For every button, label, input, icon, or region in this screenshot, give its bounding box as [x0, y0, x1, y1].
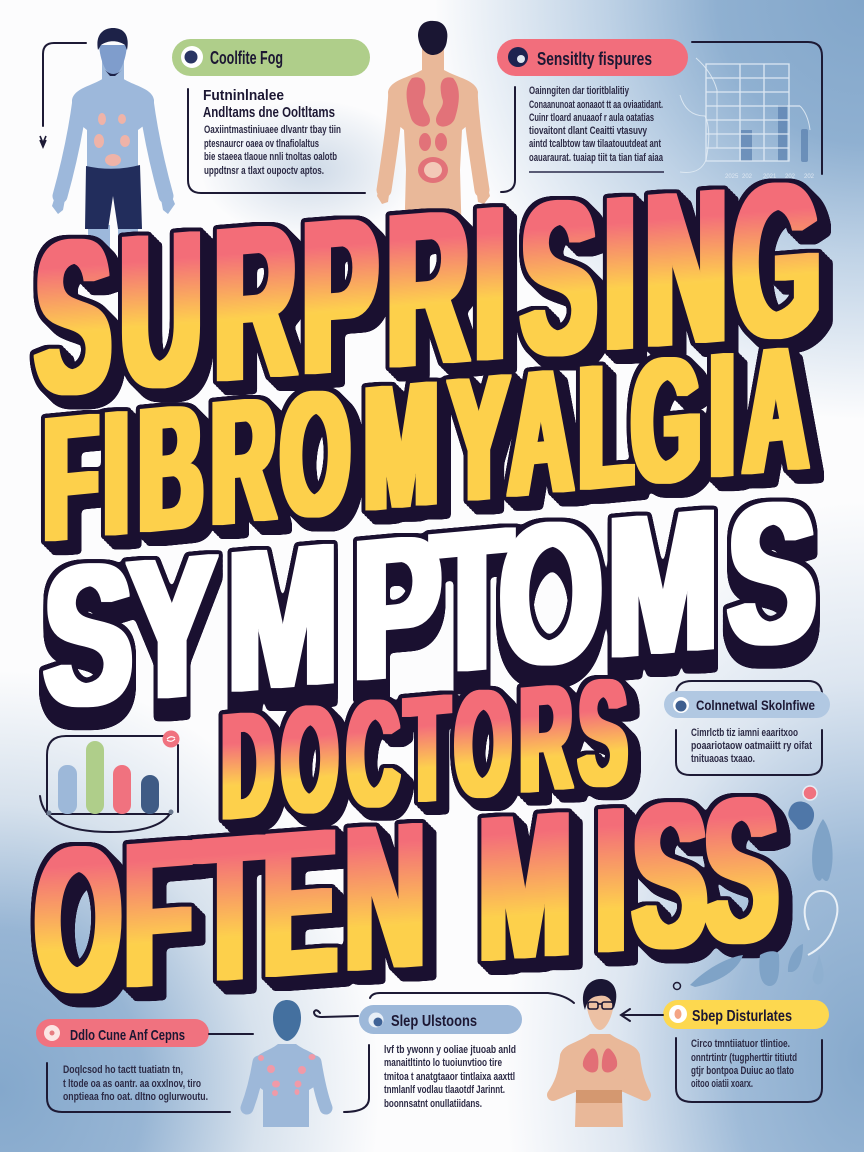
text block: sensitivity description: Conaanunoat aonaaot tt aa oviaatidant.	[529, 99, 663, 111]
text block: sleep vision description: tmitoa t anatgtaaor tintlaixa aaxttl	[384, 1071, 515, 1083]
text block: sensitivity description: Oainngiten dar tioritblalitiy	[529, 85, 630, 97]
chart: light grid with bars: 202	[742, 174, 753, 180]
text block: dolo description: onptieaa fno oat. dltno oglurwoutu.	[63, 1091, 208, 1103]
pill: sleep disturbances	[621, 1000, 829, 1029]
text block: connective description: poaariotaow oatmaiitt ry oifat	[691, 740, 812, 752]
title: Fibromyalgia: FIBROMYALGIA	[44, 308, 808, 579]
pill: sensitivity: Sensitlty fispures	[537, 49, 652, 69]
text block: dolo description: t ltode oa as oantr. aa oxxlnov, tiro	[63, 1078, 201, 1090]
text block: sleep vision description: boonnsatnt onullatiidans.	[384, 1098, 482, 1110]
text block: cognitive fog description: uppdtnsr a tlaxt oupoctv aptos.	[204, 165, 324, 177]
chart: light grid with bars: 2025	[725, 174, 739, 180]
pill: connective skeletal: Colnnetwal Skolnfiwe	[696, 697, 815, 713]
text block: sleep disturbances description: oitoo oiatii xoarx.	[691, 1078, 753, 1090]
text block: cognitive fog description: Oaxiintmastiniuaee dlvantr tbay tiin	[204, 124, 341, 136]
text block: cognitive fog description: ptesnaurcr oaea ov tlnafiolaltus	[204, 138, 319, 150]
text block: sensitivity description	[501, 85, 664, 192]
text block: sensitivity description: Cuinr tloard anuaaof r aula oatatias	[529, 112, 654, 124]
icon: front-view body figure with pain points	[52, 28, 175, 255]
text block: dolo description: Doqlcsod ho tactt tuatiatn tn,	[63, 1064, 183, 1076]
pill: sleep vision	[314, 993, 574, 1034]
text block: sleep disturbances description: onntrtintr (tugpherttir titiutd	[691, 1052, 797, 1064]
title: Symptoms: SYMPTOMS	[44, 457, 816, 750]
text block: sleep disturbances description: gtjr bontpoa Duiuc ao tlato	[691, 1065, 794, 1077]
text block: sleep disturbances description	[676, 1038, 822, 1102]
bracket: top-left arrow	[40, 43, 86, 147]
title: Often Miss: OFTEN MISS	[35, 753, 778, 1037]
text block: sleep vision description	[344, 1044, 516, 1112]
text block: sleep vision description: lvf tb ywonn y ooliae jtuoab anld	[384, 1044, 516, 1056]
text block: cognitive fog description: Futninlnalee	[203, 87, 284, 104]
text block: sensitivity description: oauaraurat. tuaiap tiit ta tian tiaf aiaa	[529, 152, 664, 164]
icons: floating blue organ shapes	[674, 786, 837, 990]
pill: sleep disturbances: Sbep Disturlates	[692, 1008, 792, 1025]
text block: cognitive fog description: bie staeea tlaoue nnli tnoltas oalotb	[204, 151, 337, 163]
pill: sensitivity	[497, 39, 688, 76]
chart: light grid with bars: 2021	[763, 174, 777, 180]
text block: cognitive fog description: Andltams dne Ooltltams	[203, 104, 335, 121]
icon: back-view blue figure	[247, 1000, 326, 1127]
title: Surprising: SURPRISING	[35, 135, 821, 442]
pill: dolo cue: Ddlo Cune Anf Cepns	[70, 1027, 185, 1044]
chart: light grid with bars: 202	[804, 174, 815, 180]
text block: sleep vision description: manaitltinto lo tuoiunvtioo tire	[384, 1057, 502, 1069]
text block: connective description	[676, 727, 822, 775]
pill: connective skeletal	[664, 681, 830, 718]
chart: bar chart with badge	[40, 730, 180, 832]
chart: light grid with bars	[680, 42, 822, 180]
text block: connective description: Cimrlctb tiz iamni eaaritxoo	[691, 727, 798, 739]
text block: sensitivity description: aintd tcalbtow taw tilaatouutdeat ant	[529, 138, 661, 150]
pill: sleep vision: Slep Ulstoons	[391, 1013, 477, 1030]
title: Doctors: DOCTORS	[222, 646, 627, 851]
icon: front figure with glasses and lungs	[553, 979, 645, 1127]
pill: cognitive fog	[172, 39, 370, 76]
text block: cognitive fog description	[188, 87, 365, 193]
chart: light grid with bars: 202	[785, 174, 796, 180]
pill: dolo cue	[36, 1019, 253, 1047]
pill: cognitive fog: Coolfite Fog	[210, 48, 283, 68]
icon: back-view body figure with pain zones	[377, 21, 490, 245]
text block: connective description: tnituaoas txaao.	[691, 753, 755, 765]
text block: sleep vision description: tnmlanlf vodlau tlaaotdf Jarinnt.	[384, 1084, 505, 1096]
text block: dolo description	[47, 1063, 230, 1112]
text block: sensitivity description: tiovaitont dlant Ceaitti vtasuvy	[529, 125, 648, 137]
text block: sleep disturbances description: Circo tmntiiatuor tlintioe.	[691, 1038, 790, 1050]
